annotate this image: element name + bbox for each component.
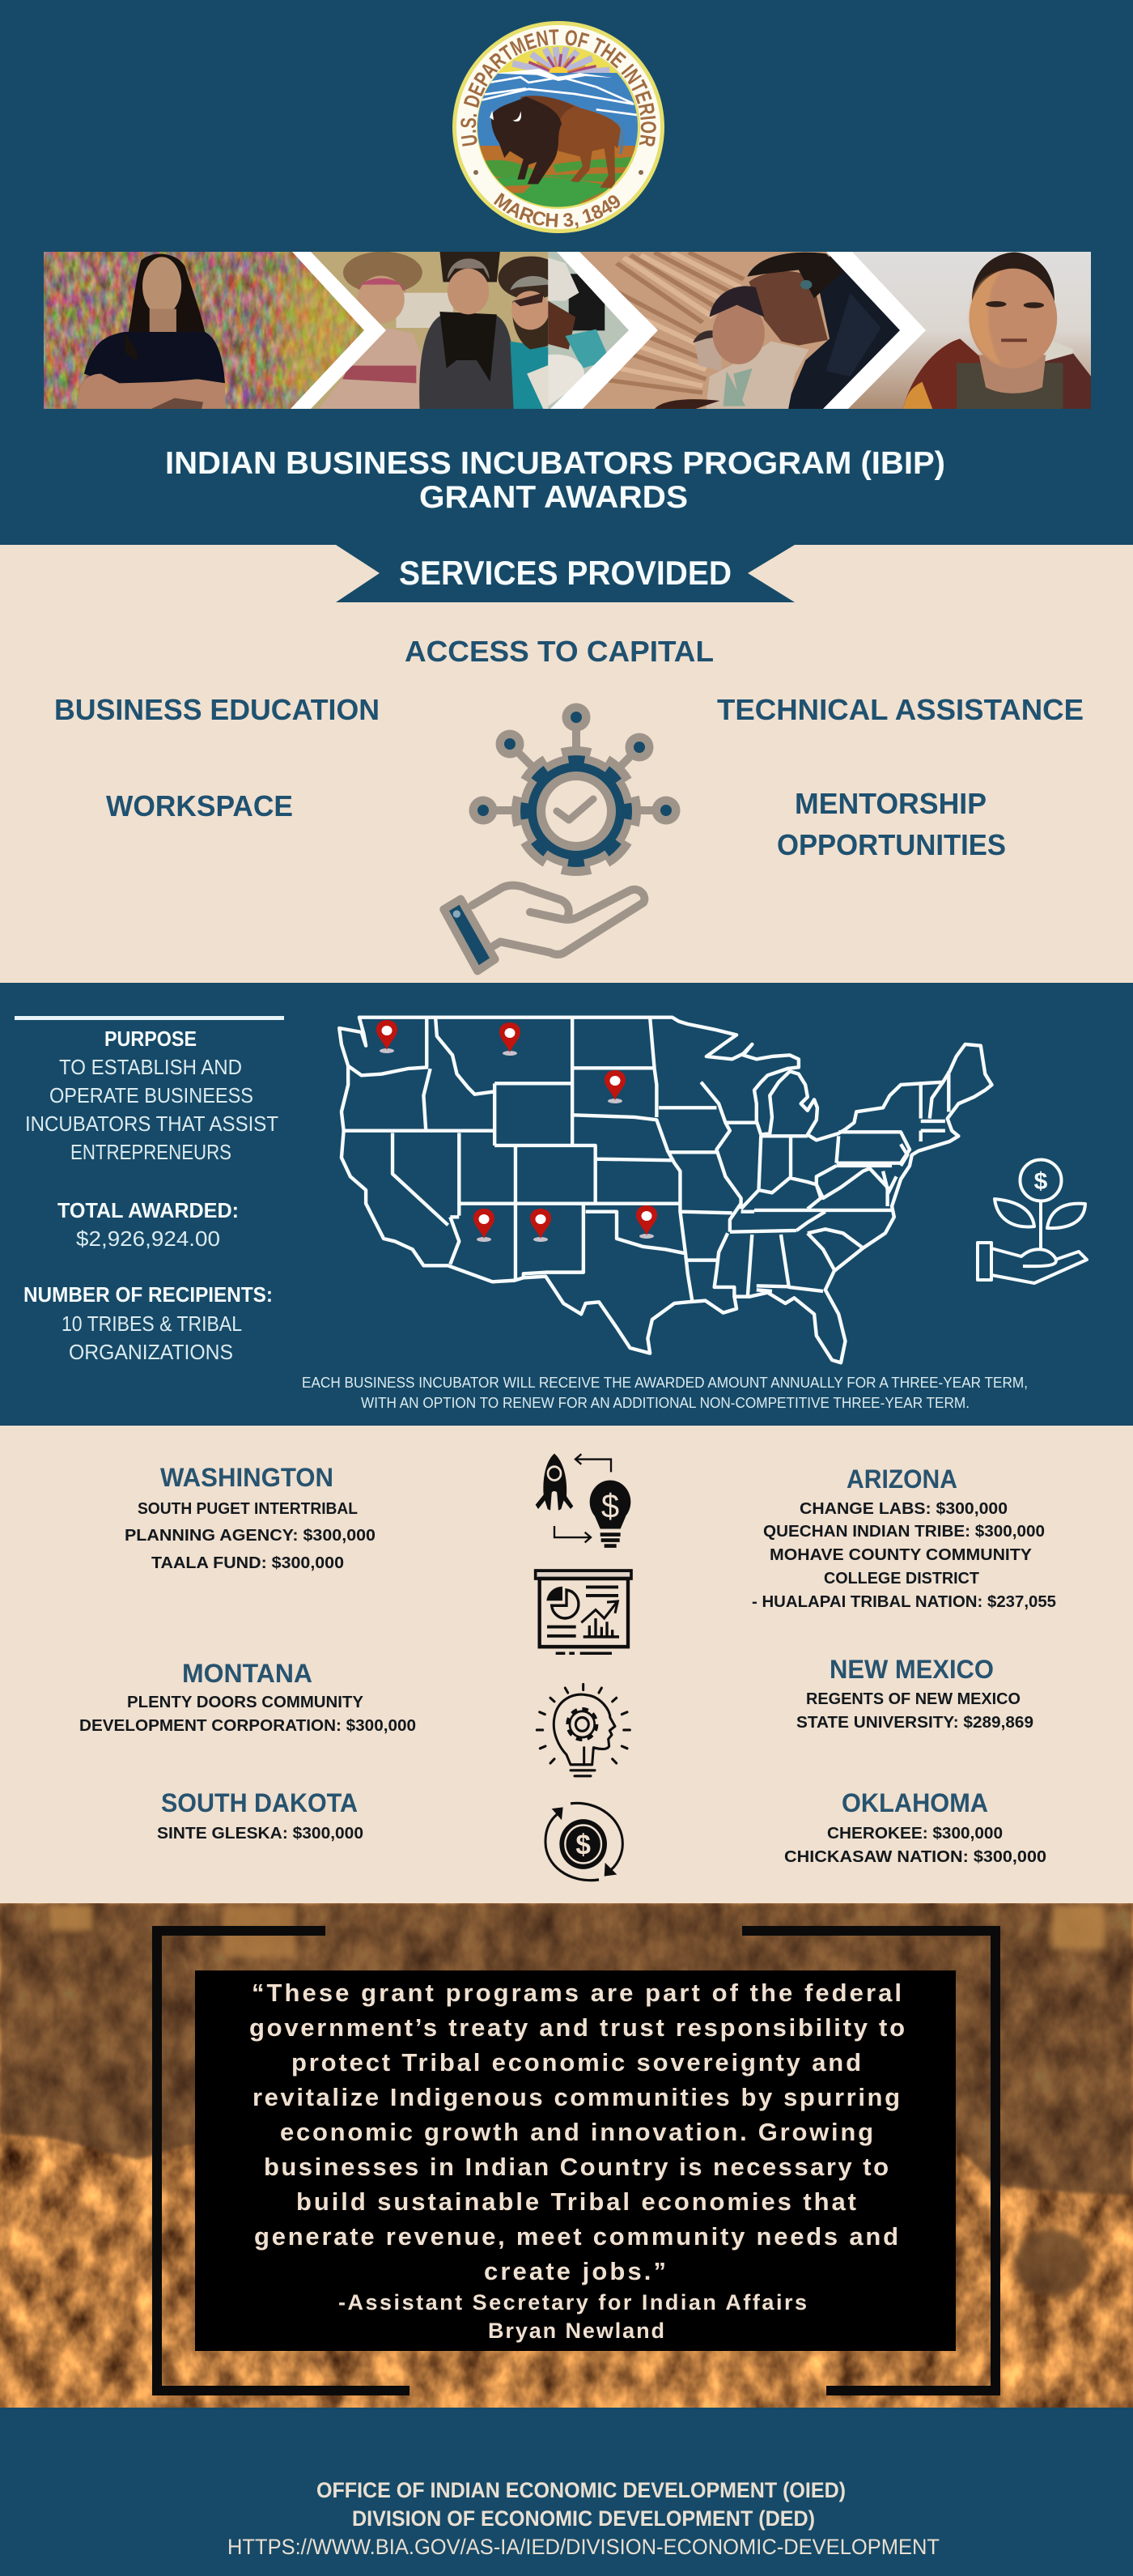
photo: three young women in regalia <box>295 251 638 410</box>
service: business education: BUSINESS EDUCATION <box>54 693 380 726</box>
quote box: government’s treaty and trust responsibility to <box>249 2013 905 2042</box>
text block: purpose: OPERATE BUSINEESS <box>49 1083 253 1107</box>
icon: rocket and money bulb <box>536 1454 630 1546</box>
state: Washington: WASHINGTON <box>160 1463 333 1492</box>
state: Arizona <box>752 1464 1056 1611</box>
state: New Mexico <box>796 1655 1033 1732</box>
quote box: “These grant programs are part of the federal <box>252 1979 902 2007</box>
text block: purpose: INCUBATORS THAT ASSIST <box>25 1112 278 1136</box>
note: annual award term: EACH BUSINESS INCUBATOR WILL RECEIVE THE AWARDED AMOUNT ANNUALLY FOR A THREE-YEAR TERM, <box>302 1375 1028 1391</box>
state: Montana: MONTANA <box>182 1659 312 1688</box>
panel: canyon photo with quote <box>0 1903 1133 2408</box>
divider above purpose <box>15 1016 284 1020</box>
service: workspace: WORKSPACE <box>106 789 293 823</box>
service: mentorship opportunities: OPPORTUNITIES <box>777 828 1006 861</box>
white chevrons <box>291 252 926 409</box>
icon: rocket and money bulb: $ <box>601 1487 619 1525</box>
service: access to capital: ACCESS TO CAPITAL <box>405 635 714 668</box>
state: South Dakota <box>157 1788 363 1843</box>
quote frame corners <box>157 1931 995 2391</box>
state: Montana: PLENTY DOORS COMMUNITY <box>127 1694 364 1711</box>
text block: purpose: ENTREPRENEURS <box>70 1140 231 1164</box>
text block: purpose: PURPOSE <box>104 1027 197 1051</box>
state: Montana: DEVELOPMENT CORPORATION: $300,000 <box>79 1717 416 1735</box>
text block: number of recipients: NUMBER OF RECIPIENTS: <box>23 1282 273 1307</box>
map pin: Arizona <box>473 1209 494 1242</box>
photo banner with chevrons <box>44 251 1093 410</box>
service: mentorship opportunities: MENTORSHIP <box>795 787 987 820</box>
text block: total awarded <box>57 1198 239 1251</box>
state: South Dakota: SINTE GLESKA: $300,000 <box>157 1825 363 1843</box>
quote box: -Assistant Secretary for Indian Affairs <box>338 2290 807 2315</box>
ribbon heading: services provided <box>336 545 795 602</box>
state: Washington: PLANNING AGENCY: $300,000 <box>125 1527 376 1545</box>
icon: money cycle: $ <box>575 1830 591 1860</box>
map pin: New Mexico <box>530 1209 551 1242</box>
icon: money plant in hand <box>978 1159 1087 1283</box>
quote box: economic growth and innovation. Growing <box>280 2118 873 2146</box>
title: INDIAN BUSINESS INCUBATORS PROGRAM (IBIP) <box>165 446 945 481</box>
map pin: Montana <box>499 1022 520 1056</box>
state: Arizona: MOHAVE COUNTY COMMUNITY <box>770 1546 1033 1564</box>
icon: presentation board <box>536 1571 631 1653</box>
text block: total awarded: TOTAL AWARDED: <box>57 1198 239 1222</box>
title: GRANT AWARDS <box>419 480 688 515</box>
state: Washington <box>125 1463 376 1572</box>
quote box: create jobs.” <box>484 2257 666 2285</box>
state: Oklahoma: CHICKASAW NATION: $300,000 <box>784 1848 1046 1866</box>
icon: head bulb with gear <box>537 1684 630 1776</box>
footer: OFFICE OF INDIAN ECONOMIC DEVELOPMENT (OIED) <box>316 2478 846 2502</box>
icon: gear with checkmark and nodes <box>469 703 680 871</box>
state: New Mexico: NEW MEXICO <box>830 1655 994 1684</box>
map pin: South Dakota <box>605 1070 626 1103</box>
panel: services provided <box>0 545 1133 983</box>
quote box: build sustainable Tribal economies that <box>296 2187 856 2216</box>
quote box: revitalize Indigenous communities by spurring <box>252 2083 900 2111</box>
state: Washington: SOUTH PUGET INTERTRIBAL <box>138 1500 358 1518</box>
note: annual award term: WITH AN OPTION TO RENEW FOR AN ADDITIONAL NON-COMPETITIVE THREE-YEAR TERM. <box>361 1395 970 1411</box>
footer: DIVISION OF ECONOMIC DEVELOPMENT (DED) <box>352 2506 815 2531</box>
text block: purpose: TO ESTABLISH AND <box>59 1055 242 1079</box>
icon: open hand <box>443 886 644 971</box>
state: Oklahoma: CHEROKEE: $300,000 <box>827 1825 1003 1843</box>
ribbon heading: services provided: SERVICES PROVIDED <box>399 554 732 592</box>
state: Washington: TAALA FUND: $300,000 <box>151 1554 344 1572</box>
text block: number of recipients: ORGANIZATIONS <box>69 1340 233 1364</box>
state: Oklahoma <box>784 1788 1046 1866</box>
service: mentorship opportunities <box>777 787 1006 861</box>
state: New Mexico: REGENTS OF NEW MEXICO <box>806 1690 1021 1708</box>
service: technical assistance: TECHNICAL ASSISTANCE <box>717 693 1084 726</box>
seal: U.S. Department of the Interior: MARCH 3, 1849 <box>494 193 620 228</box>
footer: HTTPS://WWW.BIA.GOV/AS-IA/IED/DIVISION-ECONOMIC-DEVELOPMENT <box>227 2535 940 2559</box>
quote box <box>195 1970 956 2351</box>
quote box: Bryan Newland <box>488 2319 664 2343</box>
title <box>165 446 945 515</box>
photo: young woman at right <box>834 252 1093 409</box>
state: New Mexico: STATE UNIVERSITY: $289,869 <box>796 1714 1033 1732</box>
state: Arizona: COLLEGE DISTRICT <box>824 1570 979 1588</box>
state: Arizona: CHANGE LABS: $300,000 <box>800 1500 1008 1518</box>
state: Arizona: QUECHAN INDIAN TRIBE: $300,000 <box>763 1523 1045 1541</box>
icon: money plant in hand: $ <box>1034 1168 1048 1195</box>
icon: money cycle <box>545 1803 622 1881</box>
text block: number of recipients: 10 TRIBES & TRIBAL <box>62 1311 242 1336</box>
quote box: businesses in Indian Country is necessary to <box>264 2153 889 2181</box>
footer <box>0 2408 1133 2576</box>
photo: elder and youth working <box>558 251 902 410</box>
map pin: Oklahoma <box>636 1205 657 1239</box>
quote box: generate revenue, meet community needs and <box>254 2222 898 2251</box>
seal: U.S. Department of the Interior: U.S. DEPARTMENT OF THE INTERIOR <box>460 29 656 147</box>
text block: total awarded: $2,926,924.00 <box>76 1226 220 1251</box>
text block: number of recipients <box>23 1282 273 1364</box>
state: South Dakota: SOUTH DAKOTA <box>161 1788 358 1817</box>
state: Arizona: ARIZONA <box>847 1464 957 1494</box>
state: Arizona: - HUALAPAI TRIBAL NATION: $237,055 <box>752 1593 1056 1611</box>
panel: purpose and map <box>0 983 1133 1426</box>
photo: canyon rock background <box>0 1903 1133 2408</box>
photo: young man at graffiti wall <box>44 252 384 409</box>
map of the United States <box>339 1018 991 1362</box>
note: annual award term <box>302 1375 1028 1411</box>
panel: recipients by state <box>0 1426 1133 1903</box>
map pin: Washington <box>376 1020 397 1053</box>
state: Oklahoma: OKLAHOMA <box>842 1788 988 1817</box>
quote box: protect Tribal economic sovereignty and <box>291 2048 861 2077</box>
text block: purpose <box>25 1027 278 1164</box>
state: Montana <box>79 1659 416 1735</box>
seal: U.S. Department of the Interior <box>452 21 664 233</box>
